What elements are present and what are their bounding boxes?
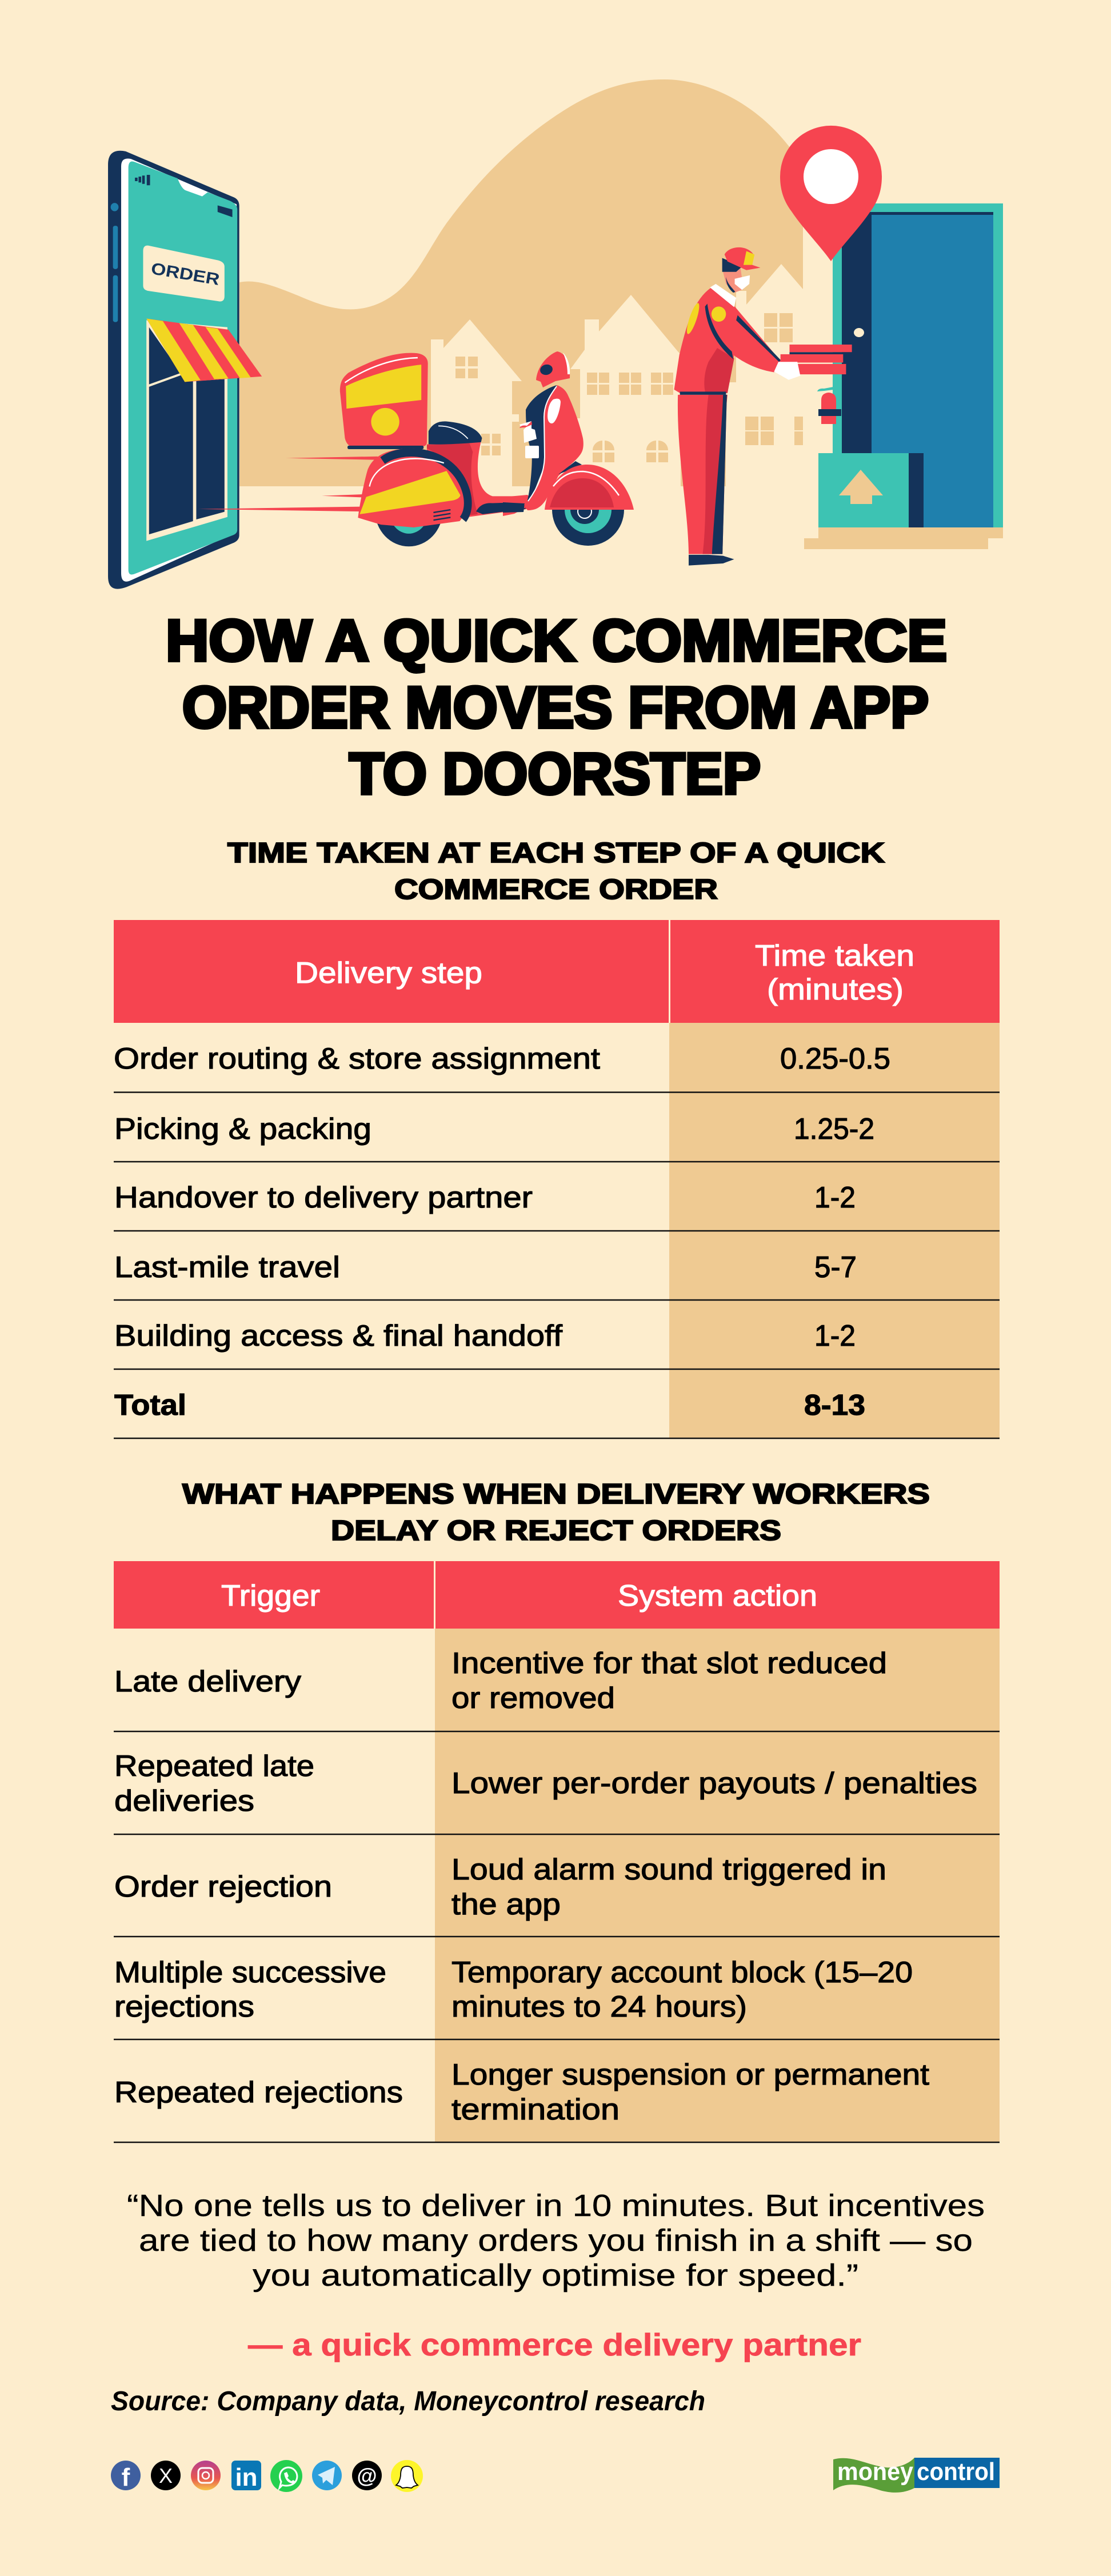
icon: facebook bbox=[111, 2461, 141, 2491]
table 1 rows: 1-2 bbox=[814, 1181, 856, 1214]
table 2 row dividers bbox=[114, 1731, 1000, 2142]
quote: are tied to how many orders you finish in a shift — so bbox=[139, 2223, 973, 2258]
speed lines and scooter bbox=[198, 351, 634, 546]
parcel box with arrow bbox=[818, 453, 924, 527]
quote attribution: — a quick commerce delivery partner bbox=[248, 2327, 861, 2362]
table 2 header bbox=[114, 1561, 1000, 1629]
table 1 header: (minutes) bbox=[767, 973, 904, 1006]
heading: delay or reject table bbox=[182, 1479, 930, 1546]
table 1 rows: Total bbox=[114, 1389, 186, 1421]
hill background bbox=[239, 79, 803, 486]
houses bbox=[431, 264, 803, 486]
table 2 rows: Incentive for that slot reduced bbox=[451, 1647, 887, 1680]
table 2 header: Trigger bbox=[221, 1579, 320, 1613]
icon: threads: @ bbox=[357, 2464, 377, 2487]
icon: X bbox=[151, 2461, 181, 2490]
title: TO DOORSTEP bbox=[349, 741, 761, 806]
icon: X: X bbox=[159, 2464, 173, 2487]
table 1 value column bbox=[669, 1023, 1000, 1438]
quote: you automatically optimise for speed.” bbox=[253, 2258, 858, 2293]
icon: facebook: f bbox=[122, 2463, 130, 2491]
table 2 rows: termination bbox=[451, 2093, 620, 2126]
doorstep bbox=[804, 527, 1003, 549]
table 1 rows: 8-13 bbox=[804, 1389, 865, 1421]
table: triggers and system actions bbox=[114, 1561, 1000, 2143]
table 1 rows: Building access & final handoff bbox=[114, 1319, 563, 1353]
table 2 rows: deliveries bbox=[114, 1785, 254, 1818]
scooter rear with delivery box bbox=[198, 353, 527, 546]
title: HOW A QUICK COMMERCE bbox=[166, 608, 947, 673]
table 1 rows: 0.25-0.5 bbox=[780, 1042, 890, 1075]
table 2 rows: Late delivery bbox=[114, 1665, 301, 1698]
table 2 header: System action bbox=[618, 1579, 817, 1613]
table 2 rows: Temporary account block (15–20 bbox=[451, 1956, 913, 1989]
door with frame bbox=[833, 203, 1003, 527]
table 1 header bbox=[114, 920, 1000, 1023]
table 1 rows: Order routing & store assignment bbox=[114, 1042, 601, 1075]
table 1 rows: Last-mile travel bbox=[114, 1251, 340, 1284]
table 1 rows: Handover to delivery partner bbox=[114, 1181, 533, 1214]
table 2 rows: rejections bbox=[114, 1990, 254, 2023]
table 2 rows: Order rejection bbox=[114, 1870, 332, 1903]
icon: linkedin: in bbox=[235, 2463, 258, 2491]
source note: Source: Company data, Moneycontrol research bbox=[111, 2386, 705, 2417]
table 1 header: Delivery step bbox=[295, 957, 482, 990]
table 1 rows: 5-7 bbox=[814, 1251, 857, 1284]
icon: snapchat bbox=[391, 2460, 423, 2492]
ORDER button label: ORDER bbox=[150, 259, 221, 289]
social icons bbox=[111, 2460, 423, 2492]
heading: time taken table: TIME TAKEN AT EACH STEP OF A QUICK bbox=[227, 838, 885, 869]
table 2 rows bbox=[114, 1647, 977, 2126]
scooter front shield and helmet bbox=[503, 351, 634, 546]
icon: fire extinguisher bbox=[817, 387, 841, 424]
table 2 rows: Repeated rejections bbox=[114, 2076, 403, 2109]
icon: linkedin bbox=[231, 2461, 261, 2491]
icon: whatsapp bbox=[270, 2460, 302, 2492]
table 1 rows: 1-2 bbox=[814, 1319, 856, 1353]
table 2 rows: Longer suspension or permanent bbox=[451, 2058, 930, 2091]
heading: delay or reject table: WHAT HAPPENS WHEN DELIVERY WORKERS bbox=[182, 1479, 930, 1510]
icon: instagram bbox=[191, 2461, 221, 2490]
table 1 rows bbox=[114, 1042, 890, 1421]
icon: location pin bbox=[780, 126, 882, 261]
table 1 row dividers bbox=[114, 1093, 1000, 1438]
moneycontrol logo: money bbox=[837, 2458, 913, 2486]
phone with storefront bbox=[108, 151, 262, 589]
quote bbox=[127, 2189, 985, 2293]
table 1 rows: Picking & packing bbox=[114, 1113, 371, 1146]
table 2 rows: Loud alarm sound triggered in bbox=[451, 1853, 886, 1886]
moneycontrol logo bbox=[833, 2458, 1000, 2493]
table 2 rows: Multiple successive bbox=[114, 1956, 386, 1989]
title bbox=[166, 608, 947, 806]
title: ORDER MOVES FROM APP bbox=[182, 675, 929, 740]
icon: telegram bbox=[312, 2461, 342, 2490]
icon: threads bbox=[352, 2461, 382, 2490]
table 1 rows: 1.25-2 bbox=[794, 1113, 874, 1146]
table 2 rows: Lower per-order payouts / penalties bbox=[451, 1767, 977, 1800]
table 2 rows: minutes to 24 hours) bbox=[451, 1990, 747, 2023]
table 1 header: Time taken bbox=[755, 939, 914, 973]
table 2 rows: the app bbox=[451, 1888, 561, 1921]
illustration: quick commerce delivery scene bbox=[108, 79, 1003, 589]
table 2 rows: or removed bbox=[451, 1682, 615, 1715]
heading: time taken table bbox=[227, 838, 885, 905]
quote: “No one tells us to deliver in 10 minutes. But incentives bbox=[127, 2189, 985, 2223]
table 2 rows: Repeated late bbox=[114, 1750, 314, 1783]
table 2 action column bbox=[435, 1629, 1000, 2143]
delivery man with pizza boxes bbox=[674, 247, 852, 566]
table: time taken at each step bbox=[114, 920, 1000, 1438]
heading: delay or reject table: DELAY OR REJECT ORDERS bbox=[331, 1515, 781, 1546]
moneycontrol logo: control bbox=[917, 2458, 995, 2486]
heading: time taken table: COMMERCE ORDER bbox=[394, 874, 718, 905]
